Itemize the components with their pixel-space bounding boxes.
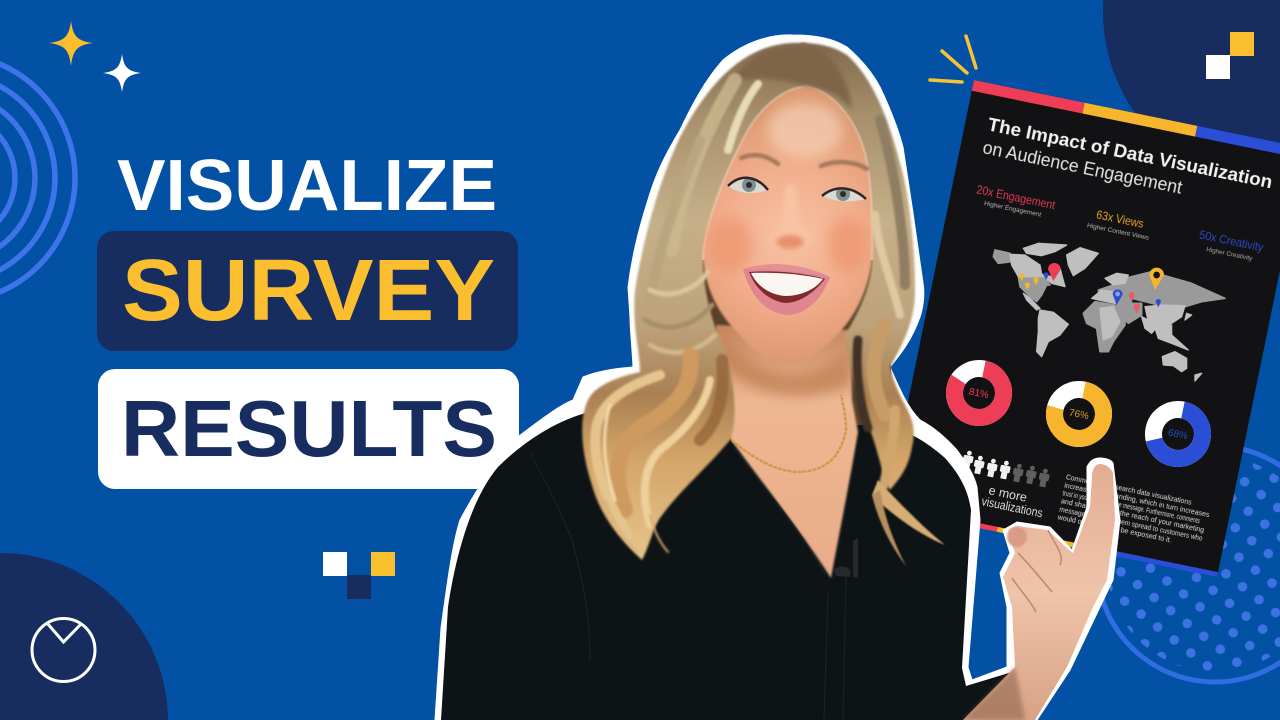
eyes [728,178,866,201]
poster title: on Audience Engagement [981,137,1184,198]
poster stat labels: 63x Views [1095,207,1145,231]
donut chart: 68% [1149,405,1207,463]
lapel microphone [834,538,858,578]
hair mass right [800,43,915,490]
pictogram caption: visualizations [980,494,1044,520]
dotted circle [1097,446,1280,682]
icon: bottom squares [323,552,395,599]
poster stat labels: 50x Creativity [1198,228,1265,254]
poster stat labels: Higher Content Views [1086,222,1150,242]
eyebrows [741,155,867,169]
donut chart: 68%: 68% [1167,428,1189,442]
face [703,86,872,364]
heading block: RESULTS [98,369,519,489]
corner shape: top right navy circle [1103,0,1280,187]
smile [743,264,830,315]
donut chart: 76%: 76% [1068,408,1090,422]
heading block: RESULTS: RESULTS [121,384,497,473]
pictogram caption: e more [987,483,1028,505]
concentric rings [0,54,75,302]
hair behind neck [690,260,895,440]
icon: yellow sparkle [49,21,93,66]
pointing hand [963,464,1115,720]
poster title: The Impact of Data Visualization [986,114,1274,192]
blouse details [530,433,846,720]
hair strands right [857,120,905,485]
icon: white sparkle [103,54,141,92]
poster body paragraph: would otherwise not be exposed to it. [1056,514,1172,545]
hair mass left [582,43,807,560]
black blouse [441,412,1030,720]
heading block: SURVEY: SURVEY [122,242,495,339]
hair strands left [595,80,758,552]
poster stat labels: 20x Engagement [975,182,1057,212]
poster body paragraph: and shares extend the reach of your marketing [1060,498,1205,535]
forehead highlight [767,102,843,158]
presenter cutout [435,35,1120,720]
poster stat labels: Higher Creativity [1206,246,1254,263]
panel: tilted infographic poster [886,80,1280,577]
white sticker outline [435,35,1120,720]
donut chart: 81% [950,364,1008,422]
poster world map [993,243,1225,381]
donut chart: 76% [1050,385,1108,443]
people pictogram [961,450,1051,488]
poster body paragraph: increase understanding, which in turn increases [1064,482,1210,519]
finger shading [1012,530,1061,612]
donut chart: 81%: 81% [968,387,990,401]
pictogram caption [980,483,1044,520]
hair crown shading [730,46,852,110]
poster stat labels [973,182,1265,265]
poster title [981,114,1274,215]
poster stat labels: Higher Engagement [983,200,1042,219]
poster sheet [886,80,1280,577]
icon: yellow emphasis lines [930,36,976,82]
icon: brand clock logo [32,618,95,682]
necklace [727,395,846,472]
thumb tip [1007,527,1027,547]
poster body paragraph: messages and help them spread to customers who [1059,506,1203,543]
heading block: SURVEY [97,231,518,351]
heading: VISUALIZE: VISUALIZE [117,146,497,226]
nose shading [768,185,814,250]
poster body paragraph: trust in your brand and the message. Furthermore, comments [1062,490,1201,525]
wrist shadow [963,667,1025,720]
hair tips right [872,480,945,566]
corner shape: bottom left navy circle [0,553,168,720]
icon: top right squares [1206,32,1254,79]
poster body paragraph: Comments on research data visualizations [1065,474,1192,507]
poster body paragraph [1056,474,1212,551]
cheek blush [708,217,868,273]
neck shadow [720,330,850,396]
neck and chest [716,325,858,578]
